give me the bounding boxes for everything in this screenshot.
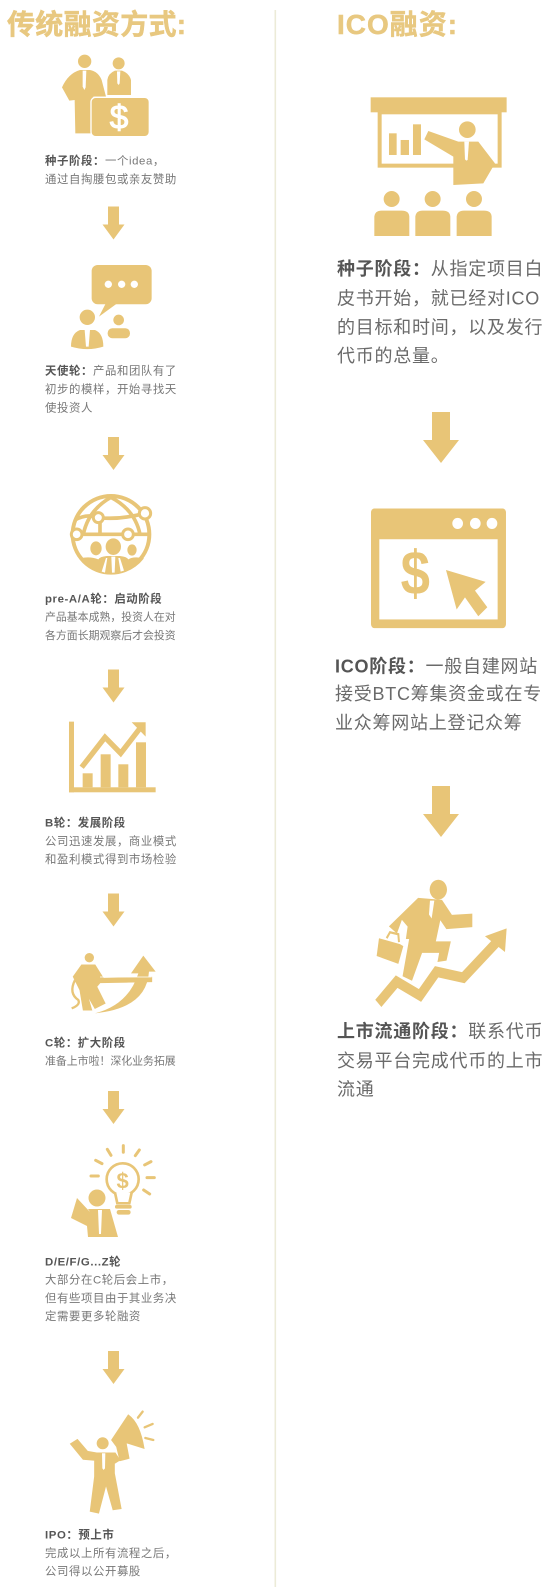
icon: runner on rising arrow [377,880,507,1003]
text: IPO: 公司得以公开募股 [45,1565,141,1578]
text: listing stage: 流通 [337,1080,374,1100]
arrow [102,894,124,926]
text: listing stage: 上市流通阶段：联系代币 [337,1020,543,1042]
text: pre-A/A round: pre-A/A轮：启动阶段 [45,592,162,606]
text: ICO seed stage: 的目标和时间，以及发行 [337,318,543,338]
icon: presenter and audience [371,97,507,236]
text: C round: 准备上市啦！深化业务拓展 [45,1054,176,1068]
arrow [423,412,459,463]
arrow [423,786,459,837]
arrow [102,1351,124,1384]
text: C round: C轮：扩大阶段 [45,1036,126,1050]
icon: man with megaphone [71,1412,153,1513]
text: D/E/F/G...Z round [45,1254,177,1323]
text: listing stage [337,1020,543,1100]
text: pre-A/A round: 产品基本成熟，投资人在对 [45,610,176,624]
text: ICO seed stage: 代币的总量。 [337,346,450,366]
text: D/E/F/G...Z round: D/E/F/G...Z轮 [45,1254,121,1268]
icon: investors with money [62,55,149,137]
text: ICO seed stage: 皮书开始，就已经对ICO [337,288,540,308]
text: IPO [45,1528,177,1578]
arrow [102,670,124,702]
text: listing stage: 交易平台完成代币的上市 [337,1051,543,1071]
text: angel round: 初步的模样，开始寻找天 [45,382,177,396]
icon: light bulb and man: $ [117,1168,129,1193]
icon: investors with money: $ [110,100,128,137]
text: angel round [45,364,177,414]
text: IPO: IPO：预上市 [45,1528,114,1542]
text: D/E/F/G...Z round: 但有些项目由于其业务决 [45,1291,177,1305]
arrow [102,206,124,240]
arrow [102,1091,124,1124]
text: angel round: 天使轮：产品和团队有了 [45,364,177,378]
text: ICO stage [335,656,542,733]
text: seed stage: 通过自掏腰包或亲友赞助 [45,172,177,186]
text: ICO stage: 业众筹网站上登记众筹 [335,713,522,733]
text: C round [45,1036,176,1068]
icon: man pulling arrow [72,953,156,1013]
text: ICO seed stage [337,258,543,366]
text: B round: 公司迅速发展，商业模式 [45,834,177,848]
text: seed stage: 种子阶段：一个idea， [45,154,165,168]
icon: browser window: $ [401,539,430,609]
text: angel round: 使投资人 [45,400,93,414]
text: IPO: 完成以上所有流程之后， [45,1546,177,1560]
text: ICO stage: ICO阶段：一般自建网站 [335,656,538,676]
icon: speech bubble [71,265,152,349]
text: B round: 和盈利模式得到市场检验 [45,852,177,866]
arrow [102,437,124,470]
icon: globe with people [71,496,151,574]
text: D/E/F/G...Z round: 大部分在C轮后会上市， [45,1272,174,1286]
icon: browser window [371,508,506,628]
text: B round: B轮：发展阶段 [45,816,126,830]
text: pre-A/A round [45,592,176,642]
text: ICO seed stage: 种子阶段：从指定项目白 [337,258,543,279]
text: seed stage [45,154,177,186]
icon: light bulb and man [71,1146,154,1237]
icon: growth chart [69,722,156,792]
title: traditional financing: 传统融资方式: [7,9,186,40]
text: B round [45,816,177,866]
text: ICO stage: 接受BTC筹集资金或在专 [335,684,542,704]
text: pre-A/A round: 各方面长期观察后才会投资 [45,628,176,642]
title: ICO financing: ICO融资: [337,9,458,40]
text: D/E/F/G...Z round: 定需要更多轮融资 [45,1309,141,1323]
